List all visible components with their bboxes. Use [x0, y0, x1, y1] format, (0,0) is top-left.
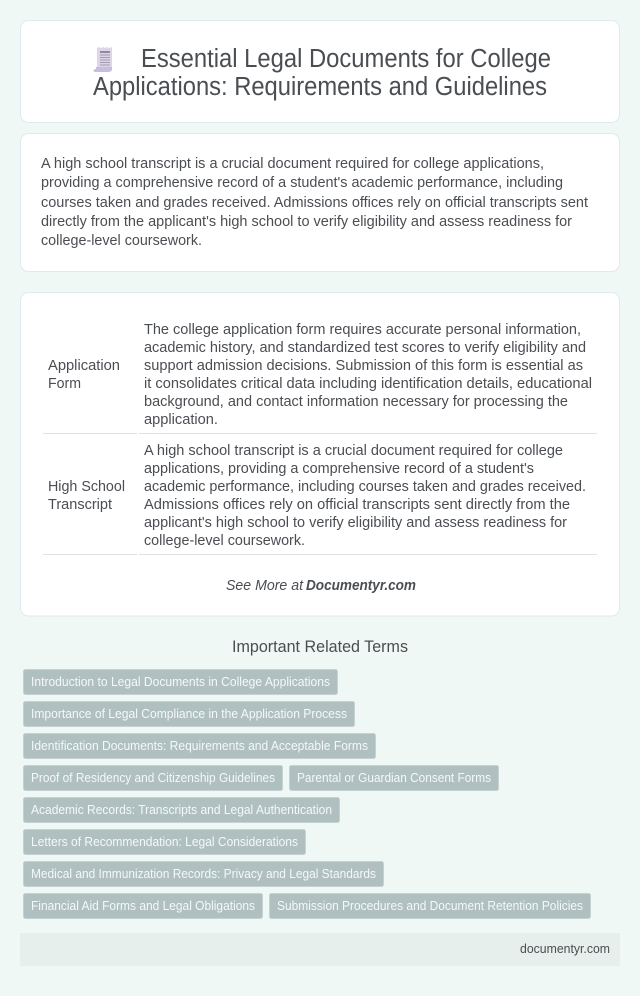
- tag: Proof of Residency and Citizenship Guidelines: [31, 771, 275, 785]
- tag: Letters of Recommendation: Legal Considerations: [31, 835, 298, 849]
- footer bar: [20, 933, 620, 966]
- tag: [270, 894, 590, 918]
- title text: Essential Legal Documents for College: [141, 45, 551, 73]
- tag: [24, 862, 384, 886]
- panel: title card: [20, 20, 620, 122]
- panel: documents table: [20, 292, 620, 616]
- table row: application form: background, and contact information necessary for processing the: [144, 394, 568, 410]
- icon: scroll document: [94, 47, 112, 72]
- tag: Parental or Guardian Consent Forms: [297, 771, 491, 785]
- panel: introduction paragraph: college-level coursework.: [41, 233, 202, 249]
- table row: high school transcript: Admissions offices rely on official transcripts sent directly from the: [144, 497, 570, 513]
- panel: introduction paragraph: courses taken and grades received. Admissions offices rely on official transcripts sent: [41, 195, 588, 211]
- tag: Introduction to Legal Documents in College Applications: [31, 675, 330, 689]
- heading: important related terms: Important Related Terms: [232, 638, 408, 656]
- tag: [290, 766, 498, 790]
- tag: [24, 798, 340, 822]
- tag: [24, 766, 282, 790]
- table row: application form: The college application form requires accurate personal information,: [144, 322, 581, 338]
- panel: introduction paragraph: directly from the applicant's high school to verify eligibility and assess readiness for: [41, 214, 572, 230]
- tag list: related terms: [24, 670, 590, 918]
- tag: [24, 734, 376, 758]
- see more link: Documentyr.com: [306, 578, 416, 594]
- panel: introduction paragraph: providing a comprehensive record of a student's academic performance, including: [41, 175, 563, 191]
- tag: Identification Documents: Requirements and Acceptable Forms: [31, 739, 368, 753]
- table row: application form: [43, 322, 597, 434]
- panel: introduction paragraph: A high school transcript is a crucial document required for college applications,: [41, 156, 544, 172]
- table row: high school transcript: applications, providing a comprehensive record of a student's: [144, 461, 534, 477]
- table row: high school transcript: A high school transcript is a crucial document required for college: [144, 443, 563, 459]
- table row: application form: it consolidates critical data including identification details, educational: [144, 376, 592, 392]
- title text: [93, 45, 551, 101]
- tag: [24, 670, 338, 694]
- see more link: See More at: [226, 578, 304, 594]
- tag: [24, 830, 306, 854]
- table row: high school transcript: Transcript: [48, 497, 112, 513]
- tag: [24, 702, 354, 726]
- table row: high school transcript: academic performance, including courses taken and grades received.: [144, 479, 586, 495]
- table row: high school transcript: college-level coursework.: [144, 533, 305, 549]
- table row: application form: application.: [144, 412, 218, 428]
- table row: application form: support admission decisions. Submission of this form is essential as: [144, 358, 583, 374]
- table row: application form: Form: [48, 376, 81, 392]
- see more link: [226, 578, 416, 594]
- tag: Financial Aid Forms and Legal Obligations: [31, 899, 255, 913]
- table row: high school transcript: applicant's high school to verify eligibility and assess readiness for: [144, 515, 567, 531]
- tag: Submission Procedures and Document Retention Policies: [277, 899, 583, 913]
- tag: Medical and Immunization Records: Privacy and Legal Standards: [31, 867, 376, 881]
- table row: application form: Application: [48, 358, 120, 374]
- table row: high school transcript: [43, 443, 597, 555]
- table row: high school transcript: High School: [48, 479, 125, 495]
- tag: Academic Records: Transcripts and Legal Authentication: [31, 803, 332, 817]
- footer bar: documentyr.com: [520, 942, 610, 956]
- panel: introduction paragraph: [20, 134, 620, 272]
- tag: [24, 894, 262, 918]
- title text: Applications: Requirements and Guidelines: [93, 73, 547, 101]
- tag: Importance of Legal Compliance in the Application Process: [31, 707, 347, 721]
- table row: application form: academic history, and standardized test scores to verify eligibility and: [144, 340, 586, 356]
